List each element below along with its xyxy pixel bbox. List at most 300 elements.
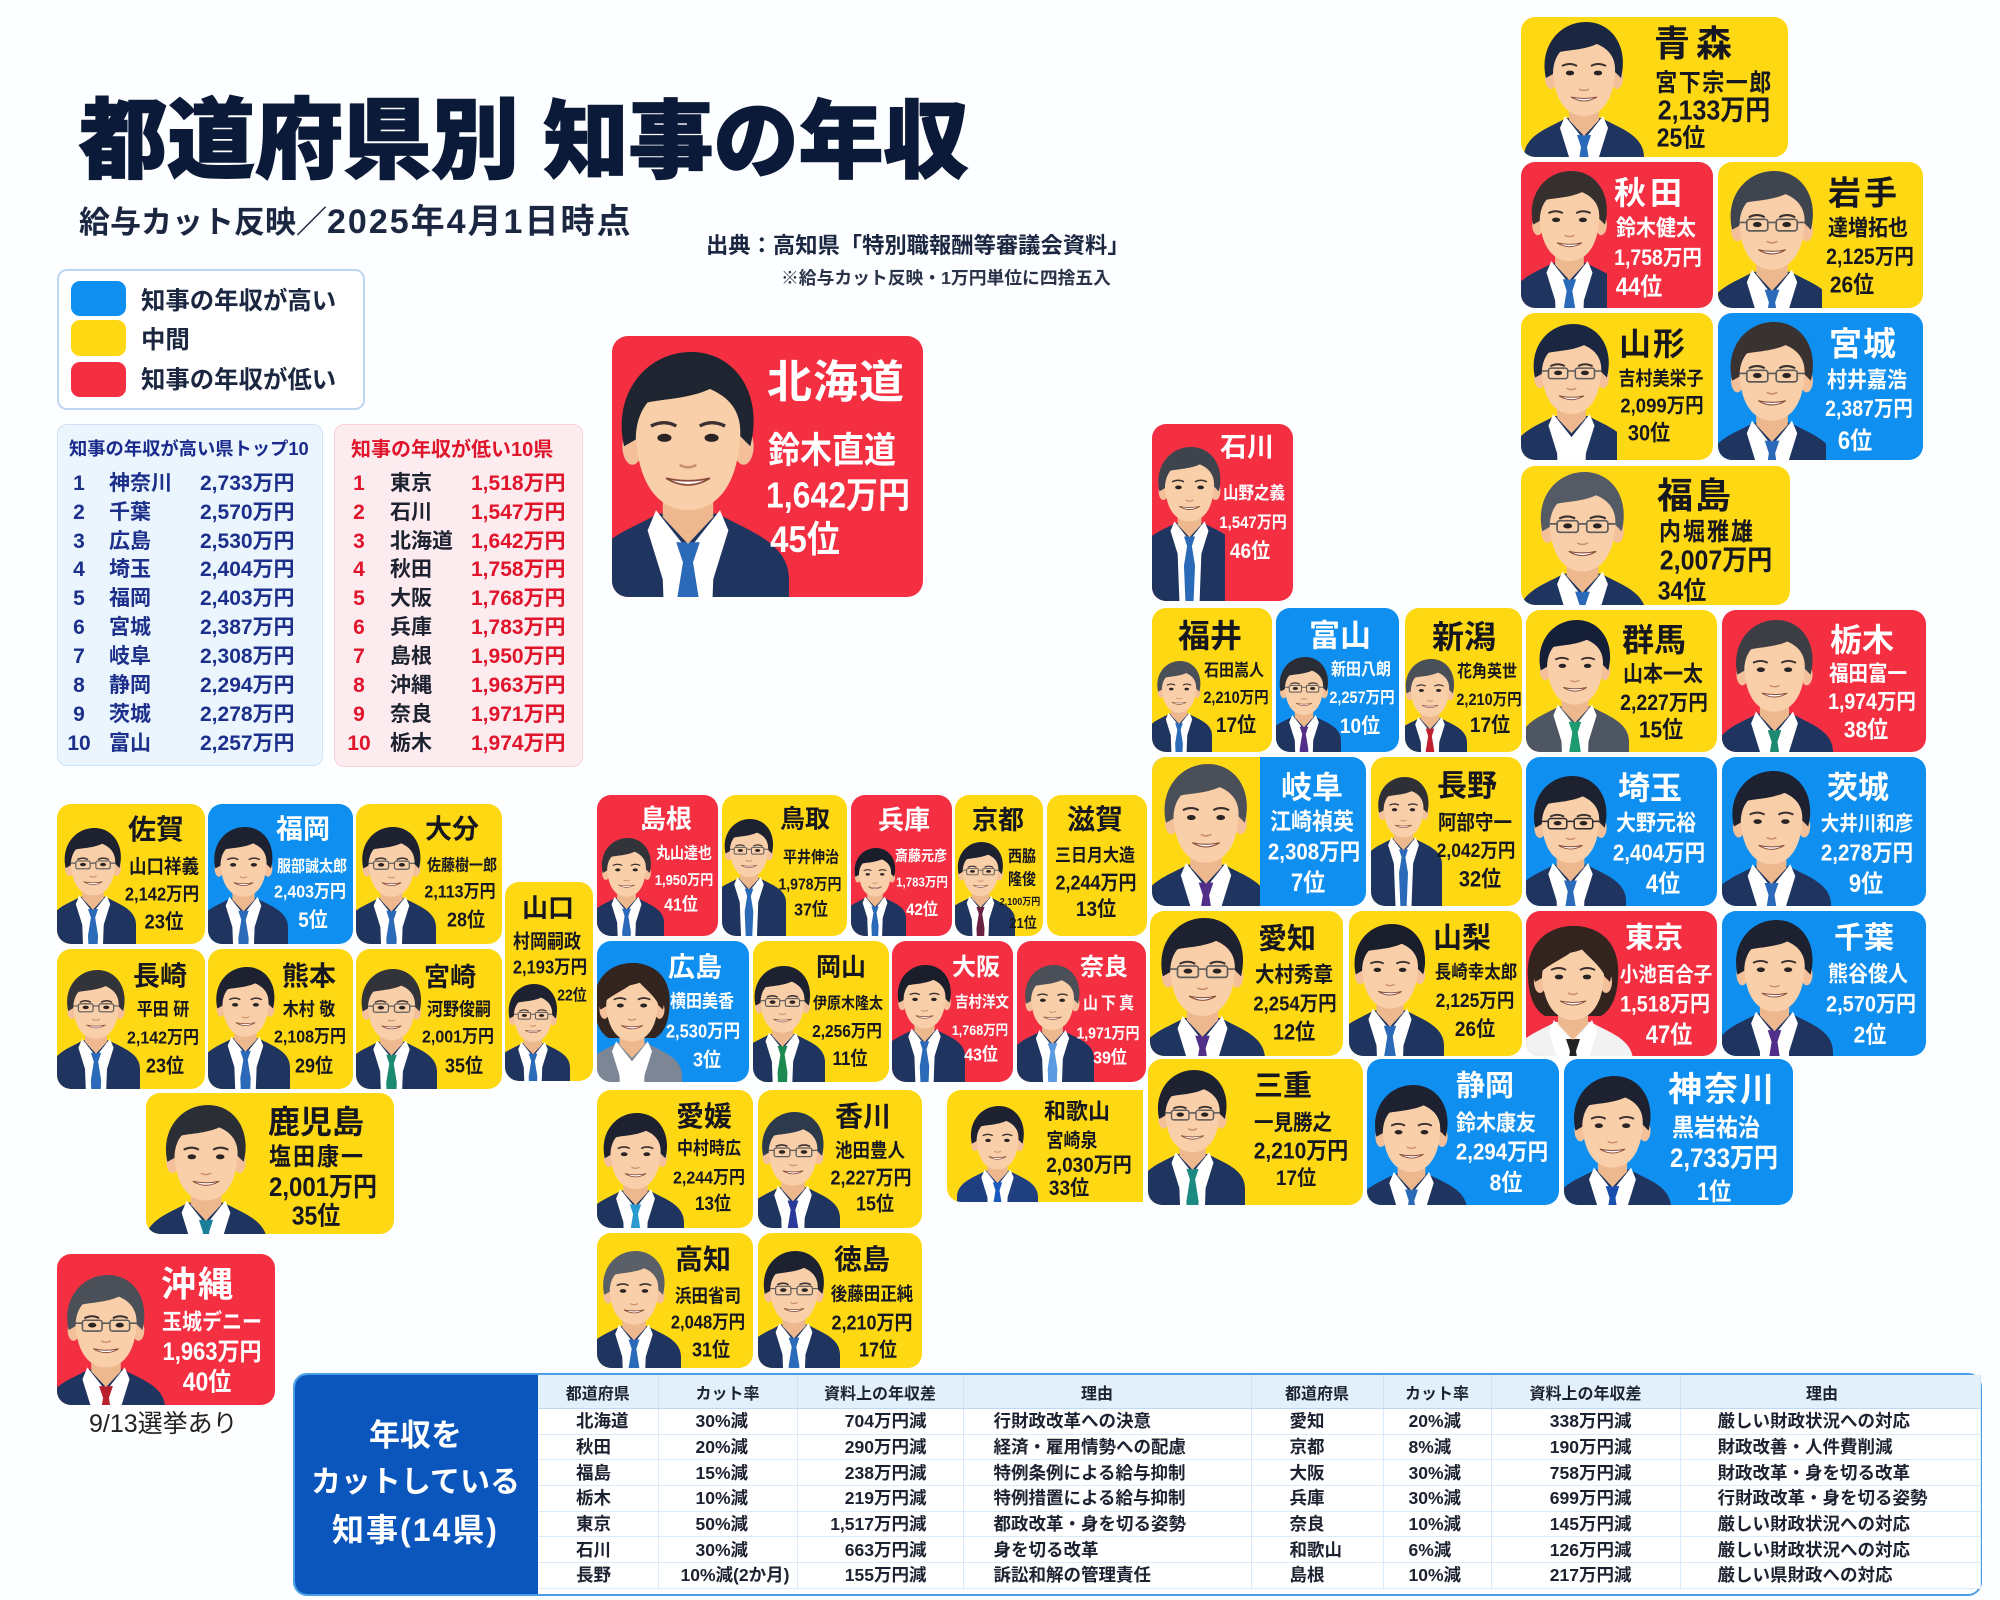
governor: 池田豊人 (835, 1139, 905, 1161)
row 10 (67, 732, 295, 755)
row 2: 2 (73, 501, 85, 524)
portrait (1148, 1070, 1245, 1205)
row 1 (353, 472, 566, 495)
rank: 33位 (1049, 1177, 1089, 1201)
card: 兵庫 (851, 795, 952, 936)
rank: 29位 (295, 1055, 333, 1077)
prefecture: 栃木 (1830, 622, 1894, 658)
row 3: 3 (73, 530, 85, 553)
table: salary cut details: 217万円減 (1550, 1565, 1632, 1585)
prefecture: 北海道 (767, 356, 905, 408)
row 5 (353, 587, 566, 610)
rank: 5位 (298, 909, 328, 933)
salary: 2,210万円 (831, 1312, 913, 1334)
table: salary cut details: 190万円減 (1550, 1437, 1632, 1457)
governor: 宮下宗一郎 (1655, 68, 1773, 96)
caption: Okinawa election: 9/13選挙あり (89, 1410, 238, 1438)
governor: 福田富一 (1829, 662, 1907, 686)
portrait (1276, 657, 1341, 752)
row 6: 宮城 (109, 616, 151, 639)
table: salary cut details: 155万円減 (845, 1565, 926, 1585)
card: 岐阜 (1152, 757, 1366, 906)
salary: 2,294万円 (1456, 1139, 1548, 1165)
rank: 37位 (794, 901, 828, 920)
rank: 12位 (1273, 1021, 1315, 1045)
table: salary cut details: 10%減(2か月) (680, 1565, 789, 1585)
row 8: 沖縄 (390, 674, 432, 697)
prefecture: 山梨 (1433, 922, 1491, 954)
governor: 村岡嗣政 (513, 931, 581, 953)
salary: 2,042万円 (1437, 839, 1515, 861)
card: 佐賀 (57, 804, 205, 944)
salary: 2,210万円 (1203, 690, 1269, 708)
rank: 8位 (1490, 1170, 1522, 1196)
source: 出典：高知県「特別職報酬等審議会資料」 (706, 233, 1130, 258)
salary: 2,387万円 (1825, 397, 1913, 421)
governor: 服部誠太郎 (277, 857, 347, 875)
salary: 2,001万円 (269, 1172, 377, 1203)
rank: 13位 (1076, 898, 1116, 922)
governor: 佐藤樹一郎 (427, 856, 497, 874)
row 9 (73, 702, 295, 726)
prefecture: 岐阜 (1281, 770, 1343, 806)
prefecture: 沖縄 (161, 1266, 235, 1304)
governor: 斎藤元彦 (895, 848, 947, 864)
row 5: 5 (73, 587, 85, 610)
prefecture: 京都 (972, 805, 1024, 835)
legend label: middle: 中間 (141, 327, 190, 354)
portrait (47, 1275, 165, 1408)
row 1: 東京 (390, 472, 432, 495)
row 3: 広島 (109, 530, 151, 553)
salary: 2,125万円 (1436, 989, 1514, 1011)
table: salary cut details: 財政改革・身を切る改革 (1718, 1463, 1910, 1483)
prefecture: 神奈川 (1668, 1071, 1776, 1109)
rank: 30位 (1628, 422, 1670, 446)
table: salary cut details: 都政改革・身を切る姿勢 (994, 1514, 1186, 1534)
card: 大分 (356, 804, 502, 944)
salary: 1,963万円 (162, 1337, 262, 1365)
table: salary cut details: 238万円減 (845, 1463, 926, 1483)
card: 宮崎 (356, 949, 502, 1089)
label line 2: カットしている (311, 1466, 520, 1499)
salary: 2,001万円 (422, 1028, 494, 1047)
salary: 2,403万円 (274, 883, 346, 902)
table side label (293, 1373, 538, 1596)
rank: 26位 (1455, 1018, 1495, 1042)
salary: 1,974万円 (1828, 690, 1916, 714)
portrait (1718, 171, 1822, 308)
card: 岡山 (753, 941, 889, 1082)
legend swatch: middle (71, 320, 126, 356)
rank: 32位 (1459, 868, 1501, 892)
table: salary cut details: 和歌山 (1290, 1540, 1342, 1560)
row 4: 4 (73, 558, 85, 581)
table: salary cut details: 身を切る改革 (994, 1540, 1098, 1560)
rank: 13位 (695, 1193, 731, 1215)
rank: 23位 (146, 1055, 184, 1077)
row 8: 8 (353, 674, 365, 697)
portrait (712, 819, 786, 902)
portrait (347, 827, 436, 927)
card: 福井 (1152, 608, 1272, 752)
card: 山形 (1521, 313, 1713, 460)
prefecture: 三重 (1254, 1070, 1312, 1102)
note: ※給与カット反映・1万円単位に四捨五入 (781, 268, 1111, 288)
card: 鳥取 (722, 795, 847, 936)
table: salary cut details: 大阪 (1290, 1463, 1324, 1483)
table: salary cut details: 145万円減 (1550, 1514, 1632, 1534)
card: 富山 (1276, 608, 1399, 752)
row 7 (73, 644, 295, 668)
prefecture: 滋賀 (1067, 804, 1123, 835)
salary: 2,048万円 (671, 1313, 745, 1333)
card: 奈良 (1017, 941, 1146, 1082)
salary: 2,099万円 (1620, 393, 1704, 417)
row 7: 1,950万円 (471, 645, 566, 668)
row 2: 2 (353, 501, 365, 524)
portrait (1554, 1076, 1671, 1208)
row 9: 2,278万円 (200, 703, 295, 726)
table: salary cut details: 都道府県 (566, 1386, 630, 1402)
row 4: 埼玉 (109, 558, 151, 581)
table: salary cut details: 栃木 (576, 1488, 611, 1508)
card: 徳島 (758, 1233, 922, 1368)
table: salary cut details: 経済・雇用情勢への配慮 (994, 1437, 1186, 1457)
portrait (1722, 771, 1831, 906)
row 5: 1,768万円 (471, 587, 566, 610)
prefecture: 広島 (668, 952, 722, 982)
rank: 45位 (770, 518, 840, 560)
table: salary cut details: 愛知 (1290, 1411, 1324, 1431)
prefecture: 兵庫 (878, 805, 930, 835)
table: salary cut details: 理由 (1081, 1386, 1113, 1402)
table: salary cut details: 厳しい財政状況への対応 (1718, 1514, 1910, 1534)
panel heading: 知事の年収が低い10県 (351, 439, 553, 461)
panel: 10 lowest (334, 424, 583, 767)
rank: 46位 (1230, 540, 1270, 564)
rank: 6位 (1838, 426, 1872, 454)
portrait (145, 1105, 267, 1242)
row 4: 秋田 (390, 558, 432, 581)
row 9 (353, 702, 566, 726)
row 5: 福岡 (109, 587, 151, 610)
row 2 (353, 501, 566, 524)
row 10: 10 (347, 732, 371, 755)
row 4: 4 (353, 558, 365, 581)
rank: 15位 (856, 1193, 894, 1215)
portrait (496, 984, 570, 1067)
rank: 35位 (445, 1055, 483, 1077)
row 1: 神奈川 (109, 472, 172, 495)
card: 岩手 (1718, 162, 1923, 308)
table: salary cut details: 理由 (1806, 1386, 1838, 1402)
governor: 石田嵩人 (1204, 661, 1264, 681)
rank: 9位 (1849, 869, 1883, 897)
salary: 1,547万円 (1219, 513, 1287, 533)
rank: 40位 (183, 1367, 231, 1396)
prefecture: 島根 (640, 804, 692, 834)
row 9: 9 (73, 703, 85, 726)
governor: 鈴木康友 (1456, 1112, 1536, 1136)
portrait (946, 842, 1015, 920)
salary: 2,227万円 (1620, 691, 1708, 715)
table: salary cut details: 50%減 (696, 1514, 748, 1534)
governor: 江崎禎英 (1270, 809, 1354, 835)
table: salary cut details: 厳しい財政状況への対応 (1718, 1411, 1910, 1431)
salary: 2,210万円 (1254, 1138, 1348, 1164)
salary: 1,978万円 (778, 875, 842, 893)
salary: 1,768万円 (952, 1023, 1008, 1039)
prefecture: 宮城 (1829, 326, 1897, 362)
portrait (1405, 659, 1467, 752)
table: salary cut details: 290万円減 (845, 1437, 926, 1457)
card: 千葉 (1722, 911, 1926, 1056)
portrait (1526, 776, 1626, 906)
card: 山口 (505, 882, 593, 1081)
governor: 塩田康一 (269, 1142, 365, 1170)
portrait (1526, 926, 1632, 1056)
governor: 達増拓也 (1828, 217, 1908, 241)
row 8: 1,963万円 (471, 674, 566, 697)
card: 秋田 (1521, 162, 1713, 308)
legend label: low: 知事の年収が低い (141, 367, 336, 394)
prefecture: 宮崎 (424, 962, 476, 992)
portrait (748, 1251, 840, 1354)
table: salary cut details: 東京 (576, 1514, 611, 1534)
governor: 木村 敬 (283, 1001, 335, 1020)
rank: 2位 (1854, 1022, 1886, 1048)
row 1: 1 (73, 472, 85, 495)
card: 福島 (1521, 466, 1790, 605)
card: 熊本 (208, 949, 353, 1089)
table: salary cut details: 758万円減 (1550, 1463, 1632, 1483)
panel: salary cut table (293, 1373, 1982, 1596)
prefecture: 長崎 (133, 962, 187, 992)
card: 愛知 (1150, 911, 1343, 1056)
salary: 2,108万円 (274, 1028, 346, 1047)
prefecture: 愛知 (1258, 924, 1316, 956)
governor: 山本一太 (1623, 663, 1703, 687)
row 7: 島根 (390, 645, 432, 668)
portrait panel (1152, 757, 1260, 906)
legend swatch: low (71, 362, 126, 397)
row 9: 奈良 (390, 703, 432, 726)
salary: 2,030万円 (1046, 1154, 1132, 1178)
row 1 (73, 472, 295, 495)
row 6: 兵庫 (390, 616, 432, 639)
prefecture: 和歌山 (1044, 1099, 1110, 1124)
prefecture: 茨城 (1827, 770, 1889, 806)
rank: 1位 (1697, 1177, 1731, 1205)
row 3: 3 (353, 530, 365, 553)
row 10 (347, 732, 566, 755)
card: 青森 (1521, 17, 1788, 157)
portrait (587, 1251, 681, 1357)
portrait (1722, 620, 1833, 752)
row 2: 2,570万円 (200, 501, 295, 524)
subtitle: 給与カット反映／2025年4月1日時点 (79, 203, 632, 241)
row 4 (73, 558, 295, 581)
prefecture: 愛媛 (676, 1101, 732, 1132)
card: 沖縄 (57, 1254, 275, 1405)
card: 和歌山 (947, 1090, 1143, 1202)
row 4 (353, 558, 566, 581)
title: 都道府県別 知事の年収 (79, 91, 968, 190)
rank: 43位 (964, 1046, 998, 1065)
table: salary cut details: カット率 (1405, 1386, 1469, 1402)
governor: 小池百合子 (1620, 962, 1712, 986)
salary: 2,254万円 (1253, 991, 1337, 1015)
portrait (201, 967, 290, 1067)
rank: 11位 (833, 1048, 867, 1070)
prefecture: 鹿児島 (268, 1104, 364, 1140)
governor: 玉城デニー (162, 1311, 262, 1335)
portrait (1521, 171, 1607, 308)
prefecture: 熊本 (282, 962, 336, 992)
portrait (50, 828, 136, 925)
legend label: high: 知事の年収が高い (141, 288, 336, 315)
governor: 大村秀章 (1255, 963, 1333, 987)
table: salary cut details: 島根 (1290, 1565, 1324, 1585)
table: salary cut details: 福島 (576, 1463, 611, 1483)
row 3 (73, 530, 295, 553)
salary: 2,244万円 (1055, 872, 1137, 894)
table: salary cut details: 厳しい県財政への対応 (1718, 1565, 1892, 1585)
table: salary cut details: 行財政改革・身を切る姿勢 (1718, 1488, 1928, 1508)
governor: 平井伸治 (783, 848, 839, 866)
portrait (957, 1106, 1038, 1197)
table: salary cut details: 資料上の年収差 (1529, 1386, 1642, 1402)
prefecture: 青森 (1654, 23, 1738, 64)
governor: 大井川和彦 (1821, 811, 1913, 835)
row 4: 1,758万円 (471, 558, 566, 581)
table: salary cut details: 15%減 (696, 1463, 748, 1483)
row 10: 2,257万円 (200, 732, 295, 755)
table: salary cut details: 704万円減 (845, 1411, 926, 1431)
table: salary cut details: 219万円減 (845, 1488, 926, 1508)
prefecture: 鳥取 (780, 806, 830, 834)
row 6: 6 (353, 616, 365, 639)
row 10: 富山 (109, 732, 151, 755)
rank: 17位 (1276, 1167, 1316, 1191)
card: 大阪 (892, 941, 1013, 1082)
table: salary cut details: カット率 (695, 1386, 760, 1402)
governor: 新田八朗 (1331, 660, 1391, 680)
governor: 村井嘉浩 (1827, 369, 1907, 393)
portrait (1349, 924, 1444, 1056)
governor: 宮崎泉 (1046, 1130, 1098, 1152)
salary: 1,783万円 (896, 876, 948, 890)
rank: 28位 (447, 909, 485, 931)
portrait (1152, 447, 1225, 601)
prefecture: 石川 (1220, 432, 1274, 462)
card: 島根 (597, 795, 718, 936)
governor: 山下真 (1083, 994, 1137, 1014)
prefecture: 岩手 (1828, 174, 1900, 212)
rank: 17位 (1470, 714, 1510, 738)
portrait (740, 966, 825, 1062)
rank: 17位 (859, 1339, 897, 1361)
card: 栃木 (1722, 610, 1926, 752)
rank: 26位 (1830, 272, 1874, 298)
governor: 花角英世 (1457, 662, 1517, 682)
salary: 2,404万円 (1613, 840, 1705, 866)
governor: 一見勝之 (1254, 1111, 1332, 1135)
prefecture: 大分 (425, 814, 479, 844)
governor: 山口祥義 (129, 855, 199, 877)
portrait (1722, 920, 1833, 1056)
portrait (1718, 322, 1826, 460)
table: salary cut details: 30%減 (1408, 1463, 1461, 1483)
salary: 1,950万円 (655, 872, 713, 888)
governor: 熊谷俊人 (1828, 963, 1908, 987)
salary: 1,971万円 (1076, 1024, 1140, 1042)
row 1: 1 (353, 472, 365, 495)
rank: 34位 (1658, 576, 1706, 605)
prefecture: 高知 (675, 1244, 731, 1275)
table: salary cut details: 20%減 (1408, 1411, 1461, 1431)
rank: 41位 (664, 896, 698, 915)
table: salary cut details: 20%減 (696, 1437, 748, 1457)
table: salary cut details: 特例措置による給与抑制 (994, 1488, 1185, 1508)
row 10: 10 (67, 732, 91, 755)
governor: 伊原木隆太 (813, 994, 883, 1012)
table: salary cut details: 秋田 (576, 1437, 611, 1457)
table: salary cut details (538, 1375, 1980, 1589)
rank: 35位 (292, 1201, 340, 1230)
table: salary cut details: 6%減 (1408, 1540, 1451, 1560)
table: salary cut details: 699万円減 (1550, 1488, 1632, 1508)
row 7: 7 (73, 645, 85, 668)
table: salary cut details: 京都 (1290, 1437, 1324, 1457)
governor: 阿部守一 (1438, 810, 1512, 834)
salary: 2,278万円 (1821, 840, 1913, 866)
salary: 2,256万円 (812, 1022, 882, 1041)
row 3: 1,642万円 (471, 530, 566, 553)
salary: 2,257万円 (1329, 690, 1395, 708)
governor: 三日月大造 (1055, 847, 1135, 866)
row 5: 5 (353, 587, 365, 610)
portrait (1521, 324, 1617, 460)
salary: 2,113万円 (424, 883, 496, 902)
rank: 17位 (1216, 714, 1256, 738)
legend swatch: high (71, 281, 126, 316)
portrait (746, 1112, 840, 1218)
table: salary cut details: 8%減 (1408, 1437, 1451, 1457)
card: 北海道 (612, 336, 923, 597)
card: 新潟 (1405, 608, 1522, 752)
salary: 2,142万円 (127, 1029, 199, 1048)
governor: 鈴木直道 (768, 430, 896, 470)
prefecture: 長野 (1437, 770, 1497, 803)
table: salary cut details: 厳しい財政状況への対応 (1718, 1540, 1910, 1560)
prefecture: 富山 (1309, 618, 1371, 654)
rank: 25位 (1657, 123, 1705, 152)
salary: 2,733万円 (1670, 1143, 1778, 1174)
portrait (1524, 22, 1644, 157)
table: salary cut details: 126万円減 (1550, 1540, 1632, 1560)
table: salary cut details: 行財政改革への決意 (994, 1411, 1151, 1431)
table: salary cut details: 兵庫 (1290, 1488, 1324, 1508)
table: salary cut details: 10%減 (1408, 1565, 1461, 1585)
row 6: 6 (73, 616, 85, 639)
card: 長野 (1371, 757, 1522, 906)
table: salary cut details: 石川 (576, 1540, 611, 1560)
row 2: 石川 (390, 501, 432, 524)
rank: 42位 (906, 900, 938, 920)
label line 1: 年収を (369, 1418, 462, 1453)
